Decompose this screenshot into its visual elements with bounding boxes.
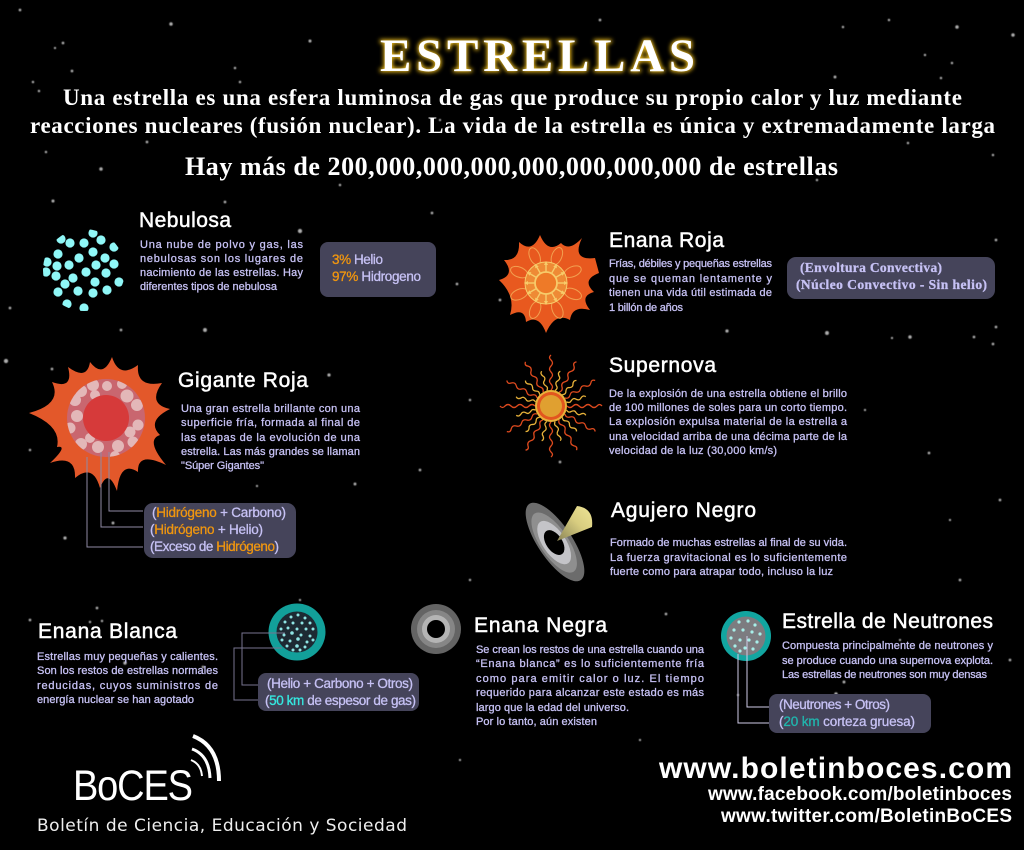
leader lines: estrella de neutrones [738,636,770,723]
description: agujero negro: Formado de muchas estrellas al final de su vida. [610,537,847,549]
panel: estrella de neutrones [721,610,994,733]
panel: enana roja [499,229,995,333]
description: enana negra: como para emitir calor o luz. El tiempo [476,673,704,685]
composition box: enana roja: (Núcleo Convectivo - Sin helio) [796,277,987,292]
description: supernova: La explosión expulsa material de la estrella a [609,416,848,428]
description: enana negra: requerido para alcanzar este estado es más [476,687,704,699]
description: enana roja [609,258,772,314]
description: enana blanca [37,651,218,706]
composition box: nebulosa: 3% Helio [332,252,383,267]
icon: red giant [29,357,170,491]
heading: agujero negro: Agujero Negro [611,499,756,522]
composition box: gigante roja: (Hidrógeno + Carbono) [152,505,286,520]
logo: BoCES: BoCES [73,761,193,809]
composition box: enana roja [787,257,995,299]
icon: supernova [500,355,602,457]
intro text: Una estrella es una esfera luminosa de gas que produce su propio calor y luz mediante [63,85,962,110]
description: estrella de neutrones: Compuesta principalmente de neutrones y [782,640,994,652]
description: supernova: de 100 millones de soles para un corto tiempo. [609,402,847,414]
description: supernova [609,388,848,457]
heading: nebulosa: Nebulosa [139,209,231,232]
description: nebulosa: diferentes tipos de nebulosa [140,281,278,293]
website links: www.boletinboces.com [658,752,1012,785]
description: enana roja: tienen una vida útil estimada de [609,287,772,299]
panel: gigante roja [29,357,361,558]
heading: estrella de neutrones: Estrella de Neutrones [782,610,993,633]
description: gigante roja: Una gran estrella brillante con una [181,403,361,415]
description: enana negra: Se crean los restos de una estrella cuando una [476,644,705,656]
icon: red dwarf [499,235,599,333]
description: nebulosa [140,239,304,293]
leader lines: enana blanca [234,633,285,700]
description: gigante roja: superficie fría, formada al final de [181,417,360,429]
description: gigante roja: "Súper Gigantes" [181,460,264,472]
title: ESTRELLAS [380,30,695,82]
composition box: estrella de neutrones: (Neutrones + Otros) [779,697,890,712]
composition box: enana blanca: (Helio + Carbono + Otros) [267,676,413,691]
icon: black dwarf [411,604,461,654]
composition box: gigante roja: (Hidrógeno + Helio) [150,522,263,537]
description: enana negra: Por lo tanto, aún existen [476,716,597,728]
heading: enana negra: Enana Negra [474,614,607,637]
description: supernova: velocidad de la luz (30,000 km/s) [609,445,777,457]
description: enana blanca: Son los restos de estrellas normales [37,665,218,677]
description: nebulosa: Una nube de polvo y gas, las [140,239,304,251]
description: enana roja: 1 billón de años [609,302,684,314]
composition box: enana roja: (Envoltura Convectiva) [800,260,942,275]
composition box: estrella de neutrones [769,694,931,733]
description: enana roja: Frías, débiles y pequeñas estrellas [609,258,772,270]
website links: www.facebook.com/boletinboces [707,784,1012,805]
leader lines: gigante roja [87,452,143,547]
intro text [30,85,995,138]
icon: nebula [41,228,124,313]
website links [658,752,1012,827]
icon: white dwarf [268,604,326,660]
website links: www.twitter.com/BoletinBoCES [720,806,1012,827]
description: enana negra [476,644,705,728]
description: gigante roja: las etapas de la evolución de una [181,432,361,444]
heading: supernova: Supernova [609,354,716,377]
panel: agujero negro [515,494,847,590]
panel: enana negra [411,604,705,728]
description: nebulosa: nacimiento de las estrellas. Hay [140,267,304,279]
description: gigante roja [181,403,361,472]
composition box: gigante roja [144,503,296,558]
composition box: nebulosa [320,242,436,297]
composition box: enana blanca [258,673,419,711]
description: enana blanca: reducidas, cuyos suministros de [37,680,218,692]
description: gigante roja: estrella. Las más grandes se llaman [181,446,360,458]
heading: enana roja: Enana Roja [609,229,724,252]
composition box: nebulosa: 97% Hidrogeno [332,269,421,284]
heading: gigante roja: Gigante Roja [178,369,308,392]
logo: BoCES [73,736,219,809]
description: estrella de neutrones: se produce cuando una supernova explota. [782,655,993,667]
icon: signal arcs [191,736,219,781]
tagline: Boletín de Ciencia, Educación y Sociedad [37,816,407,836]
heading: enana blanca: Enana Blanca [38,620,177,643]
description: nebulosa: nebulosas son los lugares de [140,253,303,265]
description: supernova: una velocidad arriba de una décima parte de la [609,431,848,443]
description: agujero negro [610,537,847,578]
description: enana blanca: energía nuclear se han agotado [37,694,194,706]
composition box: enana blanca: (50 km de espesor de gas) [265,693,416,708]
description: agujero negro: La fuerza gravitacional es lo suficientemente [610,552,847,564]
panel: enana blanca [37,604,419,711]
icon: black hole [515,494,595,590]
panel: supernova [500,354,848,457]
description: enana roja: que se queman lentamente y [609,273,772,285]
description: enana negra: largo que la edad del universo. [476,702,629,714]
intro text: reacciones nucleares (fusión nuclear). La vida de la estrella es única y extremadamente larga [30,113,995,138]
composition box: gigante roja: (Exceso de Hidrógeno) [150,539,279,554]
description: supernova: De la explosión de una estrella obtiene el brillo [609,388,847,400]
panel: nebulosa [41,209,436,313]
description: estrella de neutrones: Las estrellas de neutrones son muy densas [782,669,988,681]
icon: neutron star [721,611,771,661]
description: enana blanca: Estrellas muy pequeñas y calientes. [37,651,218,663]
star count statement: Hay más de 200,000,000,000,000,000,000,000 de estrellas [185,152,838,181]
description: agujero negro: fuerte como para atrapar todo, incluso la luz [610,566,833,578]
description: enana negra: “Enana blanca” es lo suficientemente fría [476,658,705,670]
description: estrella de neutrones [782,640,994,681]
composition box: estrella de neutrones: (20 km corteza gruesa) [779,714,915,729]
title: ESTRELLAS [380,30,695,82]
